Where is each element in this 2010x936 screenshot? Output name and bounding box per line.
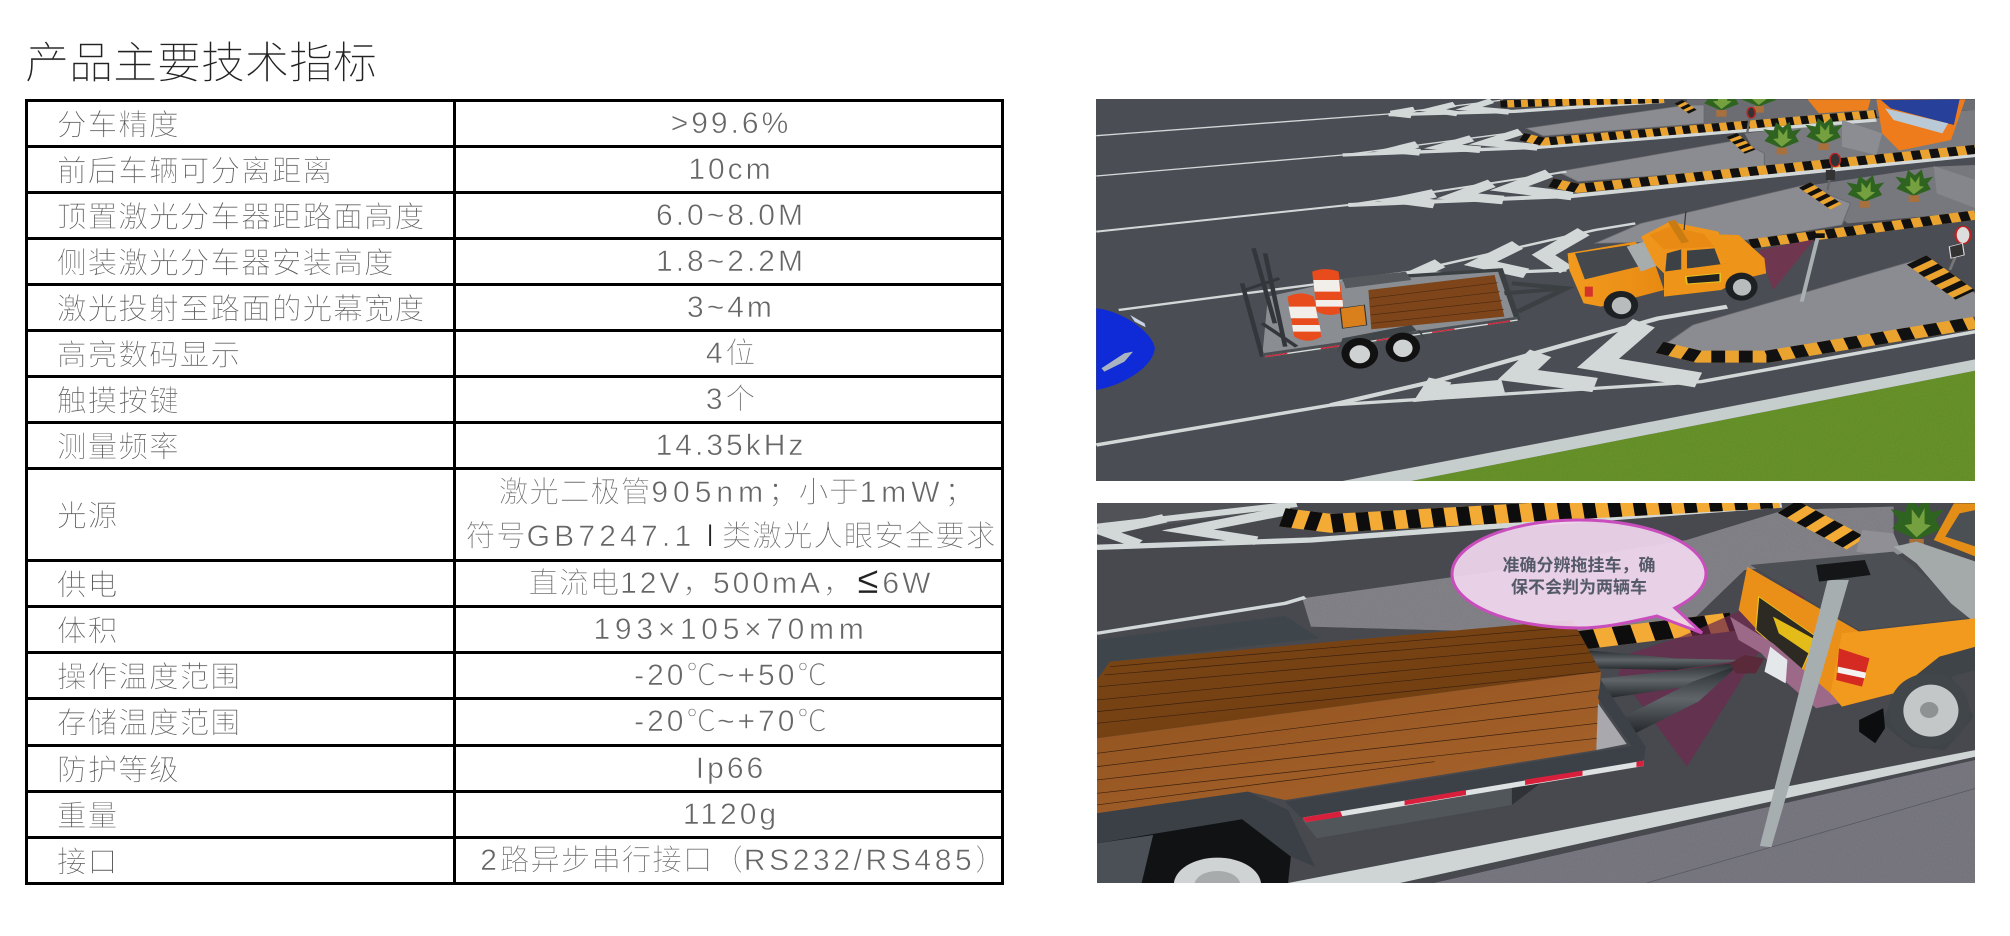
row: 测量频率: 14.35kHz xyxy=(656,428,806,462)
row: 操作温度范围: -20℃~+50℃ xyxy=(634,658,828,692)
row: 顶置激光分车器距路面高度: 6.0~8.0M xyxy=(656,198,806,232)
sensor pole xyxy=(1802,233,1825,302)
island edge xyxy=(1097,503,1274,526)
laser beam xyxy=(1759,239,1814,290)
row: 防护等级: 防护等级 xyxy=(57,754,180,786)
road surface xyxy=(1090,500,1985,887)
row: 存储温度范围 xyxy=(28,700,1001,747)
row: 分车精度: >99.6% xyxy=(671,106,791,140)
pickup truck rear xyxy=(1730,503,1976,750)
row: 侧装激光分车器安装高度: 1.8~2.2M xyxy=(656,244,806,278)
row: 体积: 193×105×70mm xyxy=(594,612,868,646)
row: 触摸按键: 触摸按键 xyxy=(57,384,180,418)
trailer frame with reflective strip xyxy=(1285,680,1646,838)
row: 激光投射至路面的光幕宽度: 3~4m xyxy=(687,290,775,324)
row: 防护等级 xyxy=(28,747,1001,793)
upper island sidewalk xyxy=(1302,507,1894,637)
hazard striped curbs xyxy=(1500,99,1976,357)
reflective red segments xyxy=(1302,761,1644,822)
row: 体积: 体积 xyxy=(57,614,118,648)
toll plaza pads xyxy=(1687,99,1976,223)
wood stack xyxy=(1097,620,1601,813)
lane markings and chevrons xyxy=(1096,100,1976,445)
row: 分车精度: 分车精度 xyxy=(57,108,180,142)
row: 接口 xyxy=(57,844,1006,878)
callout: trailer recognition: 保不会判为两辆车 xyxy=(1511,577,1647,597)
row: 接口: 2路异步串行接口（RS232/RS485） xyxy=(480,844,1006,876)
callout: trailer recognition: 准确分辨拖挂车，确 xyxy=(1502,555,1656,575)
trailer rear fender xyxy=(1102,616,1318,673)
title: 产品主要技术指标 xyxy=(25,39,377,88)
row: 重量: 重量 xyxy=(57,800,118,832)
row: 触摸按键 xyxy=(28,378,1001,424)
row: 侧装激光分车器安装高度: 侧装激光分车器安装高度 xyxy=(57,246,395,280)
row: 激光投射至路面的光幕宽度 xyxy=(28,286,1001,332)
trailer tongue tubes xyxy=(1584,650,1764,733)
row: 存储温度范围: 存储温度范围 xyxy=(57,707,241,740)
row: 体积 xyxy=(28,608,1001,654)
row: 重量: 1120g xyxy=(683,798,779,830)
row: 操作温度范围: 操作温度范围 xyxy=(57,660,241,694)
row: 高亮数码显示: 高亮数码显示 xyxy=(57,338,241,372)
row: 分车精度 xyxy=(28,102,1001,148)
row: 光源: 激光二极管905nm；小于1mW； xyxy=(499,476,975,508)
curb pier and plant xyxy=(1856,503,1944,555)
row: 前后车辆可分离距离: 10cm xyxy=(688,152,774,186)
row: 高亮数码显示: 4位 xyxy=(706,336,756,370)
road surface xyxy=(1090,97,1985,487)
row: 操作温度范围 xyxy=(28,654,1001,700)
row: 触摸按键: 3个 xyxy=(706,382,756,416)
table: technical specifications xyxy=(25,99,1004,885)
row: 顶置激光分车器距路面高度: 顶置激光分车器距路面高度 xyxy=(57,200,425,234)
row: 防护等级: Ip66 xyxy=(696,752,766,784)
road chevrons xyxy=(1097,504,1782,633)
row: 重量 xyxy=(28,793,1001,839)
row: 供电: 直流电12V，500mA，≤6W xyxy=(529,560,933,602)
row: 供电 xyxy=(28,562,1001,608)
grass verge xyxy=(1343,359,1976,481)
photo: truck and trailer at toll lanes xyxy=(1090,80,1985,487)
orange pickup truck xyxy=(1568,212,1766,319)
row: 高亮数码显示 xyxy=(28,332,1001,378)
sensor pole xyxy=(1760,560,1871,847)
trailer wheels xyxy=(1341,333,1420,369)
row: 前后车辆可分离距离 xyxy=(28,148,1001,194)
callout: trailer recognition xyxy=(1452,520,1706,633)
row: 接口: 接口 xyxy=(57,846,118,878)
trailer xyxy=(1242,248,1566,359)
blue car xyxy=(1096,308,1155,390)
road edge and lower sidewalk xyxy=(1288,750,1976,883)
photo: close-up of laser separating trailer and truck xyxy=(1097,503,1975,883)
row: 前后车辆可分离距离: 前后车辆可分离距离 xyxy=(57,154,333,188)
row: 存储温度范围: -20℃~+70℃ xyxy=(634,705,828,738)
potted plants xyxy=(1703,80,1933,208)
row: 激光投射至路面的光幕宽度: 激光投射至路面的光幕宽度 xyxy=(57,292,425,326)
row: 光源 xyxy=(28,470,1001,562)
row: 测量频率 xyxy=(28,424,1001,470)
trailer wheel and fender xyxy=(1097,792,1315,883)
traffic islands xyxy=(1526,105,1976,353)
toll booths xyxy=(1808,99,1976,208)
row: 测量频率: 测量频率 xyxy=(57,430,180,464)
laser fan xyxy=(1618,589,1804,766)
road signs xyxy=(1747,107,1971,270)
row: 顶置激光分车器距路面高度 xyxy=(28,194,1001,240)
hazard striped curbs xyxy=(1282,499,1856,641)
row: 光源: 光源 xyxy=(57,500,118,532)
row: 供电: 供电 xyxy=(57,568,118,602)
row: 侧装激光分车器安装高度 xyxy=(28,240,1001,286)
row: 光源: 符号GB7247.1Ⅰ类激光人眼安全要求 xyxy=(466,520,996,552)
traffic barrels xyxy=(1287,269,1367,341)
